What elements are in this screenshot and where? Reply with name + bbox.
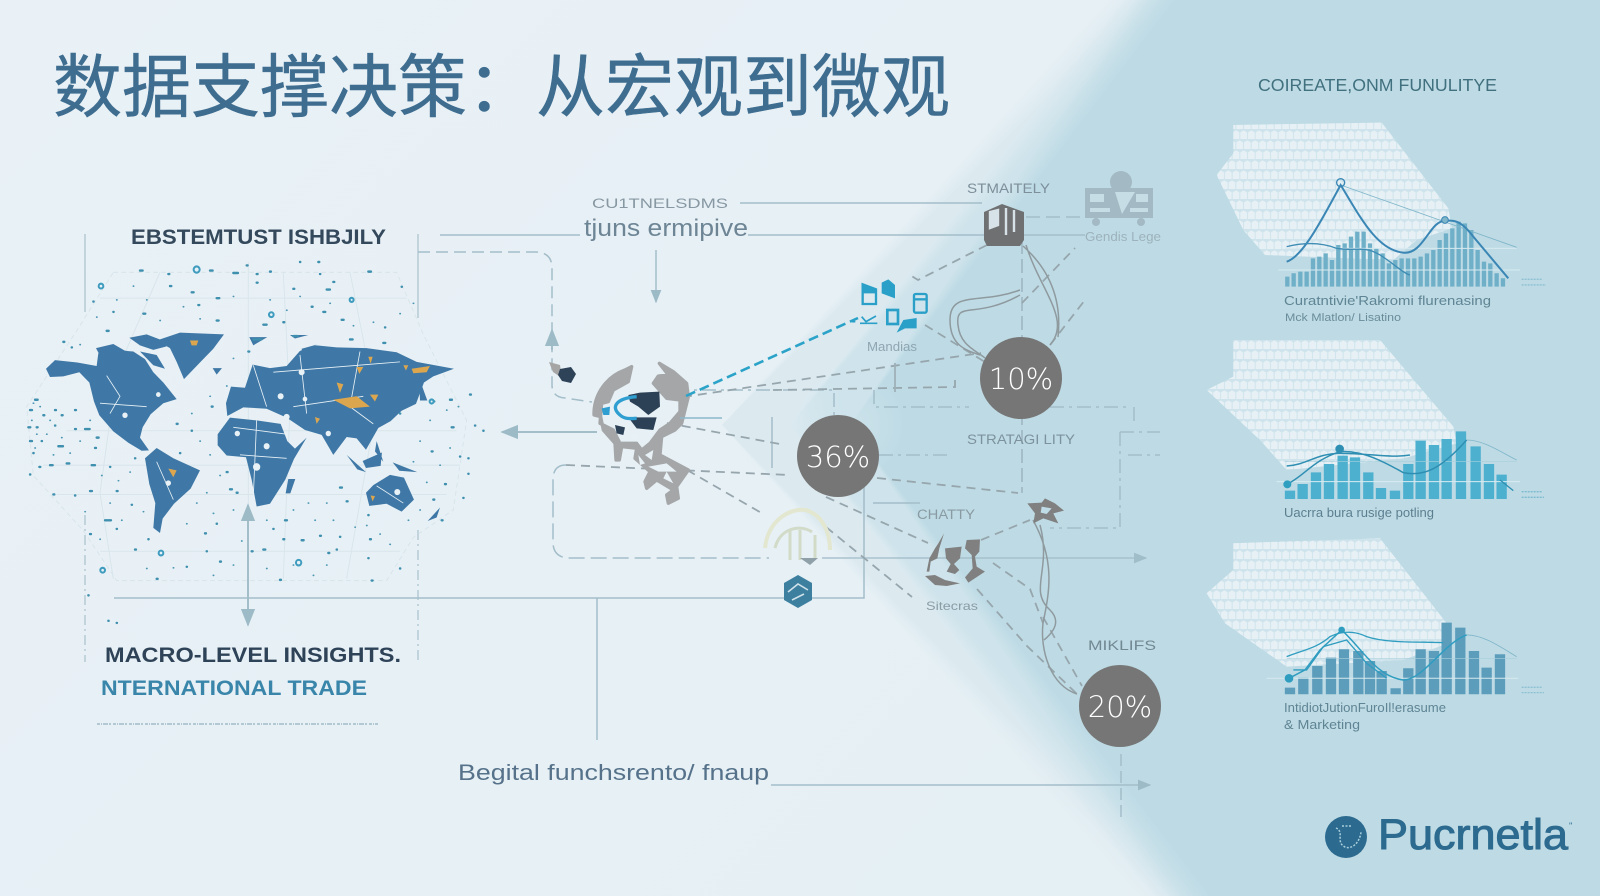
scattered data points bbox=[28, 262, 484, 623]
stat: 36% bbox=[797, 415, 879, 497]
squiggle lines bbox=[950, 245, 1077, 694]
continent holes bbox=[122, 369, 400, 495]
denser small dots bbox=[32, 286, 459, 575]
icon: pale arch bbox=[765, 510, 830, 565]
subheading: international trade: NTERNATIONAL TRADE bbox=[101, 677, 367, 700]
label: bottom centre: Begital funchsrento/ fnaup bbox=[458, 760, 769, 785]
hub side line bbox=[680, 417, 722, 419]
icon: small left node bbox=[549, 362, 576, 383]
heading: macro-level insights: MACRO-LEVEL INSIGHTS. bbox=[105, 644, 401, 667]
logo mark bbox=[1325, 816, 1367, 858]
connector lines bbox=[114, 203, 1160, 820]
icon: truck and person bbox=[1085, 171, 1153, 226]
label: stmaitely: STMAITELY bbox=[967, 181, 1050, 196]
heading: chart column: COIREATE,ONM FUNULITYE bbox=[1258, 75, 1497, 95]
icon: blue data devices bbox=[852, 279, 927, 333]
caption: third chart: & Marketing bbox=[1284, 717, 1360, 732]
fine print bbox=[97, 723, 378, 725]
stat: 20% bbox=[1079, 665, 1161, 747]
title: 数据支撑决策：从宏观到微观 bbox=[53, 49, 950, 126]
continents bbox=[46, 333, 454, 533]
ring markers bbox=[99, 266, 434, 573]
label: upper centre: CU1TNELSDMS bbox=[592, 196, 728, 211]
stat: 36%: 36% bbox=[806, 440, 870, 474]
logo trademark: '' bbox=[1569, 821, 1573, 831]
caption: first chart: Curatntivie'Rakromi flurenasing bbox=[1284, 294, 1491, 308]
caption: first chart bbox=[1284, 294, 1491, 324]
label: centre heading: tjuns ermipive bbox=[584, 215, 748, 242]
label: gendis lege: Gendis Lege bbox=[1085, 230, 1161, 244]
caption: third chart: IntidiotJutionFuroIl!erasume bbox=[1284, 700, 1446, 715]
icon: small figure bbox=[1027, 498, 1064, 523]
world map bbox=[27, 262, 484, 623]
label: chatty: CHATTY bbox=[917, 507, 975, 522]
stat: 10%: 10% bbox=[989, 362, 1053, 396]
dashed grey links bbox=[566, 245, 1085, 694]
logo bbox=[1325, 811, 1573, 859]
label: handias: Mandias bbox=[867, 340, 917, 354]
heading: map top label: EBSTEMTUST ISHBJILY bbox=[131, 226, 386, 249]
stat: 10% bbox=[980, 337, 1062, 419]
panel: macro world map bbox=[27, 226, 484, 724]
country borders and interior gaps bbox=[100, 352, 403, 503]
frame lines bbox=[85, 234, 418, 662]
logo wordmark: Pucrnetla bbox=[1378, 811, 1568, 859]
globe grid bbox=[27, 262, 467, 586]
caption: third chart bbox=[1284, 700, 1446, 732]
caption: first chart: Mck Mlatlon/ Lisatino bbox=[1285, 312, 1401, 324]
blue dashed link bbox=[686, 318, 858, 396]
chart: second bbox=[1207, 340, 1544, 499]
label: miklifs: MIKLIFS bbox=[1088, 638, 1156, 653]
icon: hexagon cube bbox=[784, 575, 812, 608]
icon: central hub bbox=[594, 363, 688, 503]
highlighted trade regions bbox=[168, 341, 430, 501]
chart: third bbox=[1207, 538, 1544, 694]
label: sitecras: Sitecras bbox=[926, 599, 978, 613]
label: strategy: STRATAGI LITY bbox=[967, 432, 1075, 447]
caption: second chart: Uacrra bura rusige potling bbox=[1284, 506, 1434, 520]
chart: first bbox=[1217, 123, 1546, 287]
icon: building top bbox=[984, 204, 1024, 246]
stat: 20%: 20% bbox=[1088, 690, 1152, 724]
panel: corporate charts bbox=[1207, 75, 1546, 732]
icon: people group bbox=[925, 533, 985, 586]
